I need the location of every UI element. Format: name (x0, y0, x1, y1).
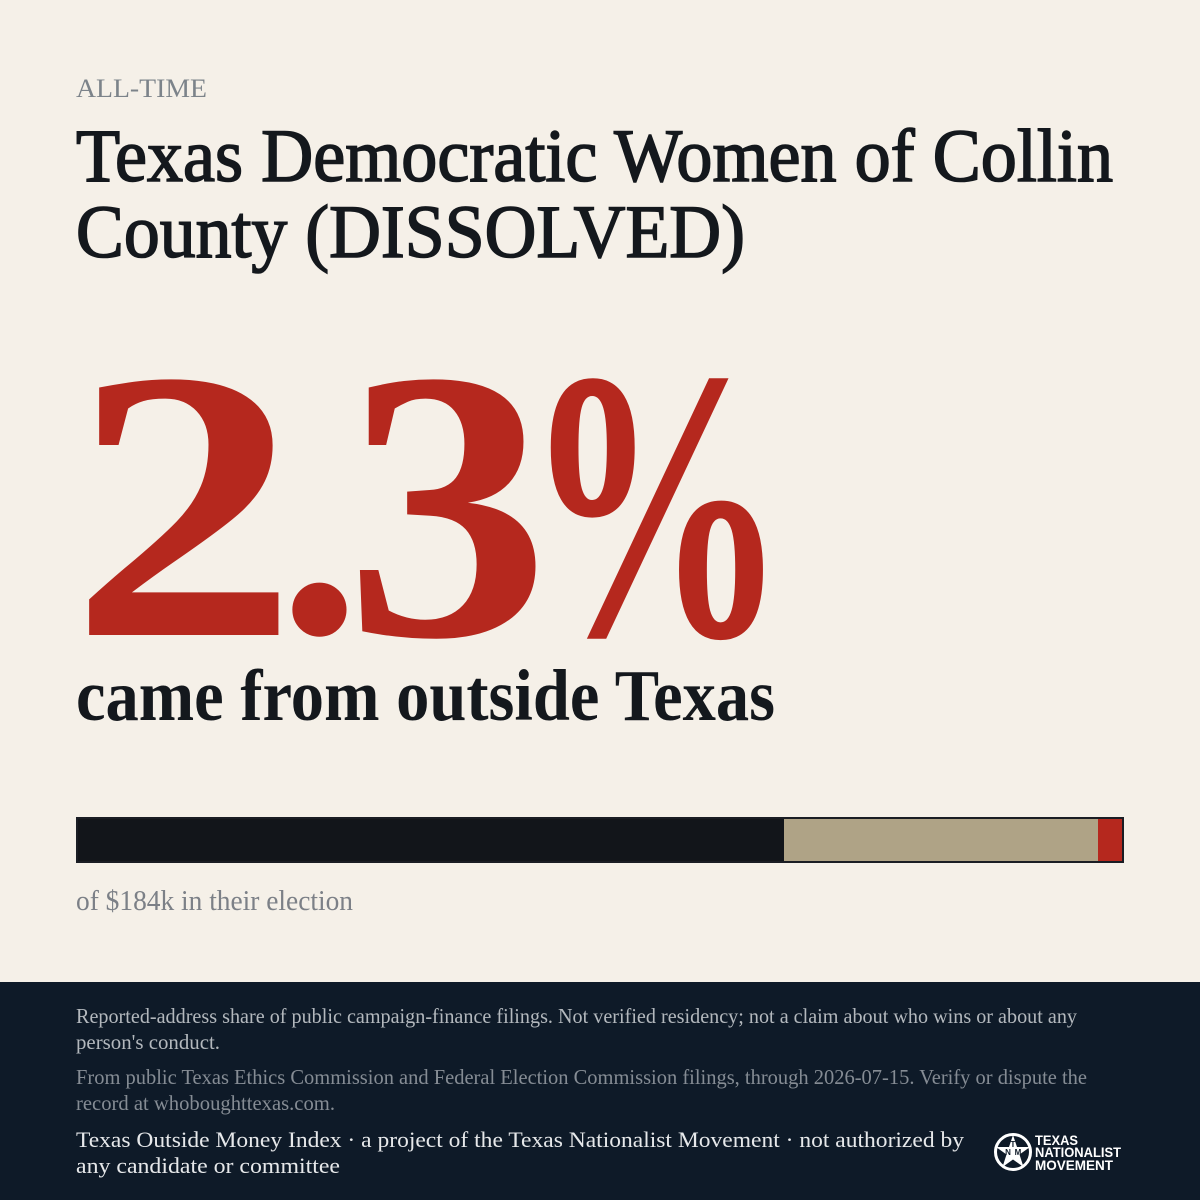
bar caption: of $184k in their election (76, 886, 353, 917)
project credit: any candidate or committee (76, 1153, 340, 1178)
icon: star in ring: M (1015, 1148, 1022, 1157)
title: Texas Democratic Women of Collin (76, 115, 1113, 198)
title: County (DISSOLVED) (76, 191, 745, 274)
subheading: came from outside Texas (76, 655, 775, 736)
big percentage: 2 (70, 292, 298, 719)
source text (76, 1065, 1087, 1115)
logo wordmark: NATIONALIST (1035, 1145, 1122, 1160)
stacked share bar (76, 817, 1124, 863)
project credit: Texas Outside Money Index · a project of the Texas Nationalist Movement · not authorized by (76, 1127, 965, 1152)
logo wordmark: MOVEMENT (1035, 1158, 1114, 1173)
logo wordmark: TEXAS (1035, 1133, 1078, 1148)
big percentage: % (524, 292, 788, 719)
title (76, 115, 1113, 274)
disclaimer text: Reported-address share of public campaign-finance filings. Not verified residency; not a claim about who wins or about any (76, 1004, 1077, 1028)
big percentage (70, 292, 788, 719)
disclaimer text: person's conduct. (76, 1030, 220, 1054)
logo: Texas Nationalist Movement (996, 1133, 1122, 1173)
icon: star in ring (996, 1134, 1030, 1170)
logo wordmark (1035, 1133, 1122, 1173)
icon: star in ring: N (1005, 1148, 1011, 1157)
icon: star in ring: T (1011, 1140, 1016, 1149)
eyebrow label: ALL-TIME (76, 74, 207, 103)
source text: From public Texas Ethics Commission and Federal Election Commission filings, through 2026-07-15. Verify or dispute the (76, 1065, 1087, 1089)
source text: record at whoboughttexas.com. (76, 1091, 335, 1115)
footer panel (0, 982, 1200, 1200)
big percentage: . (278, 335, 361, 705)
big percentage: 3 (344, 292, 550, 719)
project credit (76, 1127, 965, 1178)
disclaimer text (76, 1004, 1077, 1054)
